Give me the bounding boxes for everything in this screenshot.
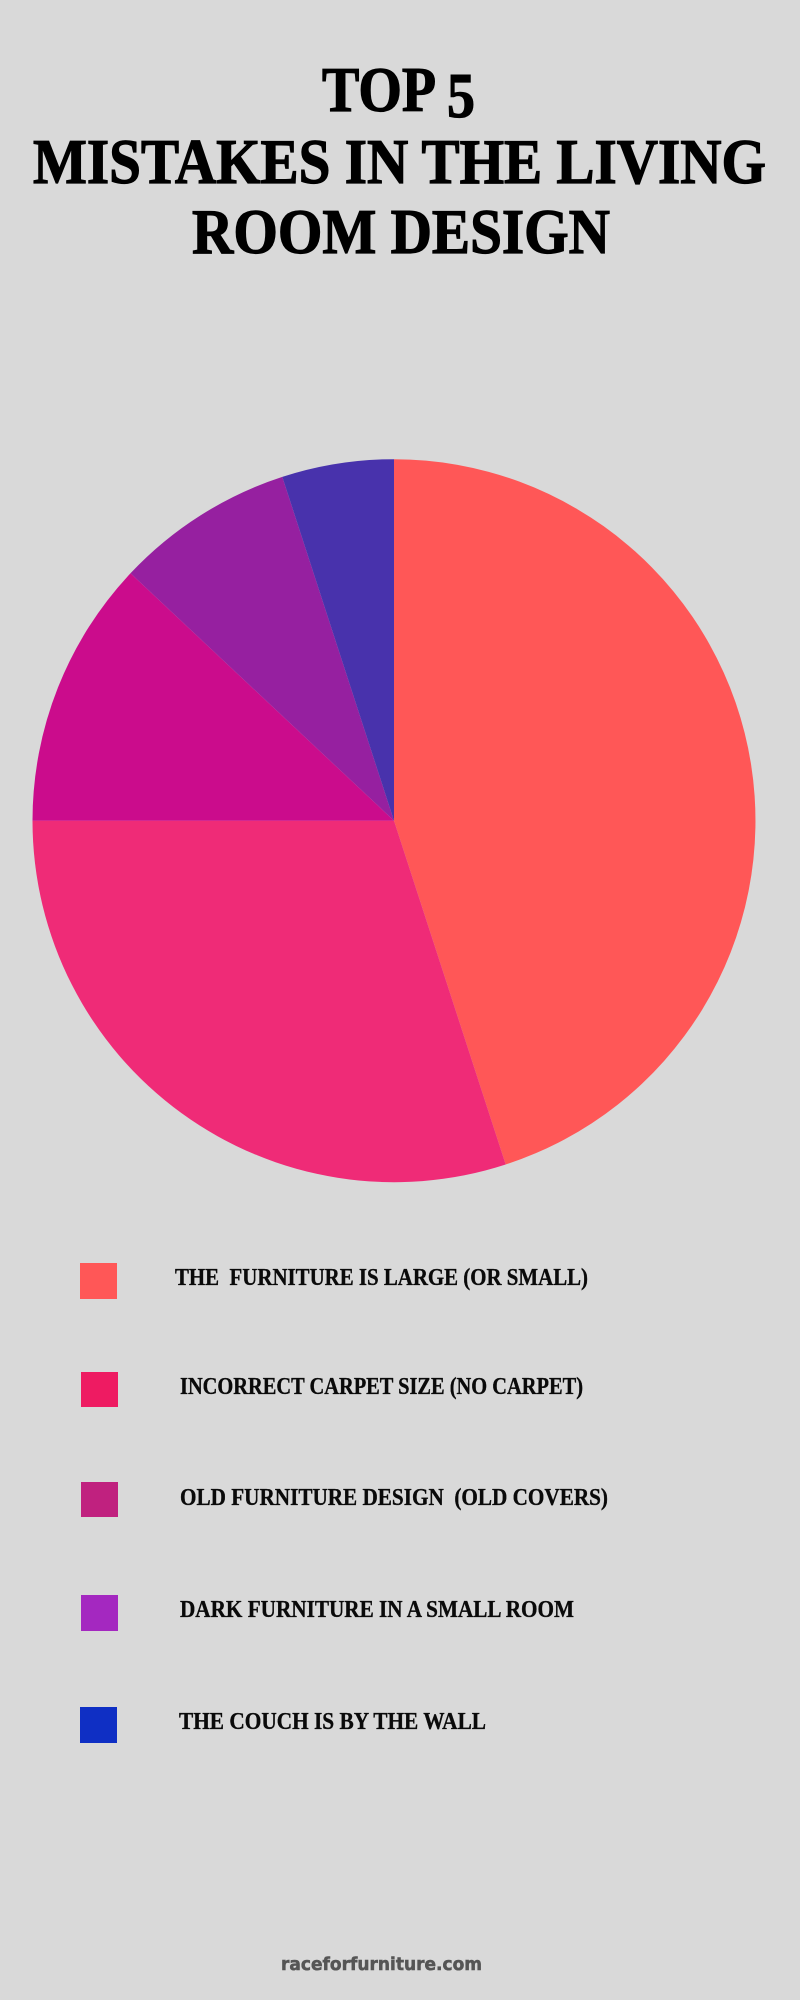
legend item 5 (80, 1707, 486, 1743)
title line 1: 5 (447, 61, 475, 131)
label 2: INCORRECT CARPET SIZE (NO CARPET) (180, 1374, 583, 1400)
swatch: coral (80, 1263, 117, 1299)
label 1: THE FURNITURE IS LARGE (OR SMALL) (175, 1265, 588, 1291)
title line 1: TOP (322, 55, 447, 125)
slice: dark furniture 8% (130, 477, 394, 821)
swatch: purple (81, 1595, 118, 1631)
slice: furniture size 45% (394, 459, 755, 1164)
swatch: blue (80, 1707, 117, 1743)
slice: couch by the wall 5% (282, 459, 394, 821)
pie chart (32, 459, 755, 1182)
slice: carpet size 30% (32, 821, 506, 1182)
swatch: magenta (81, 1482, 118, 1517)
label 3: OLD FURNITURE DESIGN (OLD COVERS) (180, 1485, 608, 1511)
legend item 2 (81, 1372, 583, 1407)
legend item 1 (80, 1263, 588, 1299)
legend item 4 (81, 1595, 574, 1631)
legend (80, 1263, 608, 1743)
title (33, 55, 766, 267)
legend item 3 (81, 1482, 608, 1517)
swatch: pink (81, 1372, 118, 1407)
label 4: DARK FURNITURE IN A SMALL ROOM (180, 1597, 574, 1623)
label 5: THE COUCH IS BY THE WALL (179, 1709, 486, 1735)
slice: old furniture design 12% (32, 573, 394, 821)
title line 3: ROOM DESIGN (192, 197, 610, 267)
footer website: raceforfurniture.com (281, 1954, 482, 1975)
